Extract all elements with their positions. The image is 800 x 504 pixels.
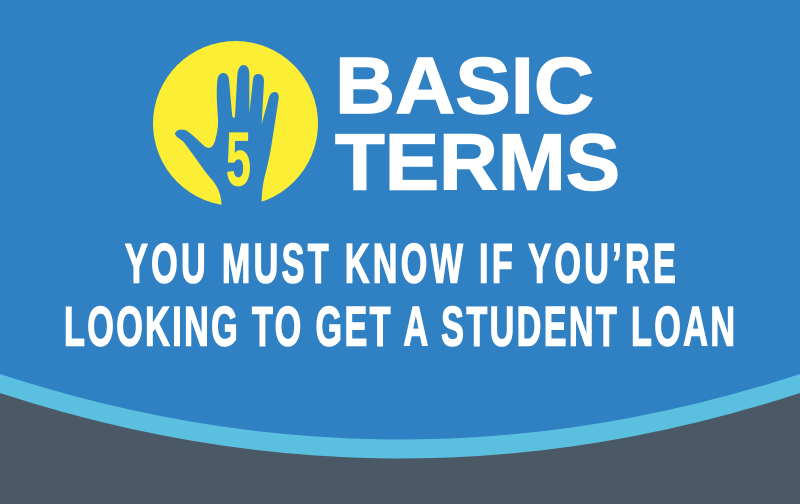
light blue curved band bbox=[0, 374, 800, 504]
title: Basic Terms bbox=[335, 41, 620, 206]
subtitle bbox=[64, 232, 735, 357]
title line: BASIC: BASIC bbox=[335, 41, 594, 130]
yellow circle bbox=[153, 41, 318, 206]
hand silhouette bbox=[175, 65, 279, 208]
title line: TERMS: TERMS bbox=[335, 117, 620, 206]
icon: yellow circle with hand and number 5 bbox=[153, 41, 318, 208]
subtitle line 1: YOU MUST KNOW IF YOU’RE bbox=[125, 232, 676, 294]
dark slate base bbox=[0, 393, 800, 504]
subtitle line 2: LOOKING TO GET A STUDENT LOAN bbox=[64, 295, 735, 357]
footer: curved band and dark base bbox=[0, 374, 800, 504]
number 5: 5 bbox=[226, 117, 251, 203]
